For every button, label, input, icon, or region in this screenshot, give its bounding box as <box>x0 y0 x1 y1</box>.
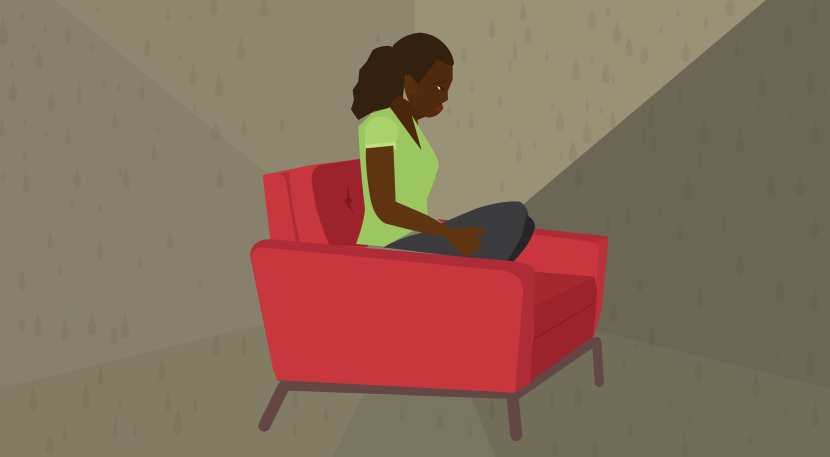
hair on head <box>393 33 454 84</box>
sleeve hem <box>365 142 397 149</box>
armchair: front arm and legs <box>250 239 599 435</box>
armchair: far arm and seat <box>437 219 608 385</box>
far arm face <box>513 233 598 383</box>
shirt <box>356 107 439 247</box>
seat cushion top <box>533 272 594 306</box>
right floor <box>470 330 830 457</box>
back cushion <box>312 159 368 247</box>
face <box>404 57 453 117</box>
back leg <box>597 342 599 382</box>
back seam <box>280 172 300 243</box>
armchair: back <box>263 159 368 250</box>
cushion tuft <box>344 183 354 215</box>
dark right wall <box>500 0 830 389</box>
centre floor <box>333 395 495 457</box>
left floor <box>0 324 363 457</box>
ear <box>405 75 417 96</box>
front arm face <box>251 247 523 393</box>
far arm outer edge <box>590 238 608 341</box>
ponytail <box>351 46 407 120</box>
front arm top and side <box>250 239 535 393</box>
sleeve <box>365 117 398 146</box>
front right leg <box>513 398 516 435</box>
neck <box>388 95 430 152</box>
base rail <box>278 337 593 399</box>
top wall wedge <box>55 0 415 200</box>
far leg <box>507 215 535 261</box>
woman <box>351 33 535 261</box>
front left leg <box>264 387 283 426</box>
lips <box>435 106 442 111</box>
pants <box>356 201 528 261</box>
lit back wall <box>380 0 766 240</box>
seat cushion front <box>533 277 597 339</box>
eye <box>437 86 441 90</box>
arm and hand <box>366 146 487 257</box>
chair back panel <box>263 159 367 250</box>
far arm top <box>437 219 608 283</box>
seat base <box>529 303 597 385</box>
seat line <box>533 303 596 339</box>
eyebrow <box>433 79 448 85</box>
